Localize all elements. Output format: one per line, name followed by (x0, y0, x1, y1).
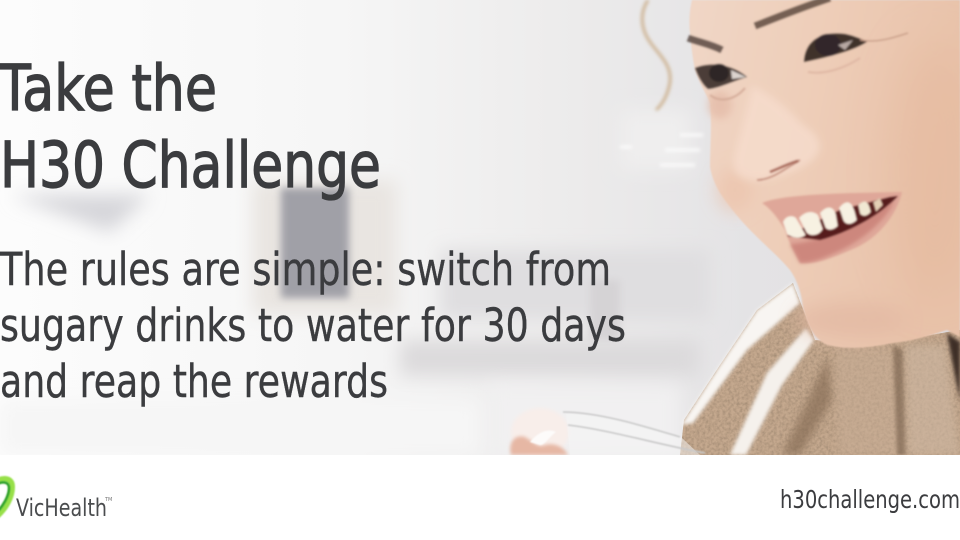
face (688, 0, 960, 348)
left eyebrow (688, 38, 722, 50)
right eyebrow (755, 0, 830, 26)
VicHealth logo: TM (104, 497, 112, 503)
footer band (0, 455, 960, 540)
VicHealth logo: VicHealth (16, 494, 107, 522)
stray curl of hair and light glints (620, 0, 703, 165)
title: Take the (0, 52, 217, 125)
left eye (695, 64, 747, 99)
body text: and reap the rewards (0, 355, 388, 408)
teeth (783, 198, 883, 238)
icon: green heart mark (0, 479, 12, 516)
VicHealth logo (0, 479, 112, 522)
right eye (804, 33, 908, 73)
mouth: lips (762, 192, 902, 263)
title (0, 52, 381, 202)
body text: sugary drinks to water for 30 days (0, 299, 626, 352)
body text (0, 243, 626, 408)
water glass (563, 412, 705, 455)
towel (680, 283, 960, 455)
mouth: dark interior (787, 196, 898, 240)
nose (733, 85, 820, 181)
title: H30 Challenge (0, 129, 381, 202)
hand holding glass (508, 430, 569, 455)
body text: The rules are simple: switch from (0, 243, 611, 296)
